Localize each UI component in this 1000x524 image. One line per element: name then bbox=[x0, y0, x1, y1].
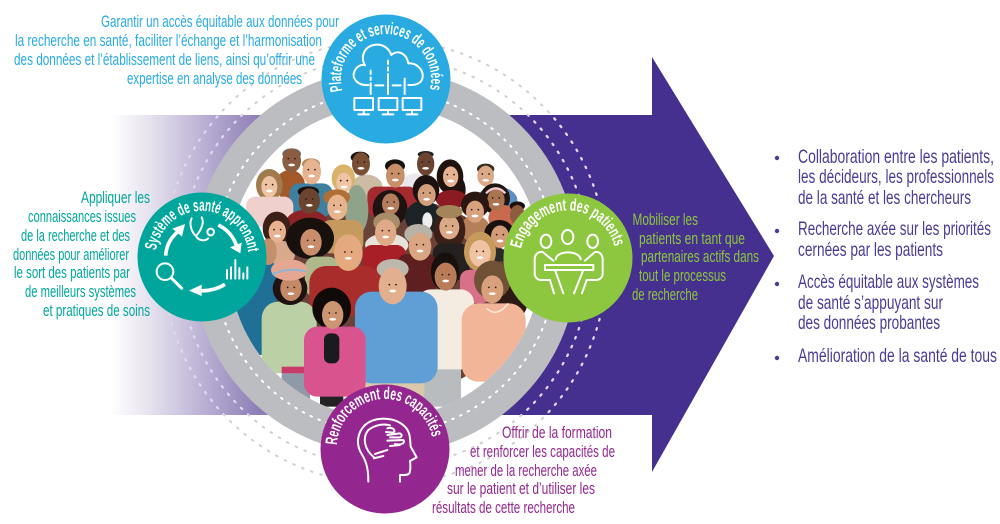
text: système description: de meilleurs systèmes bbox=[25, 282, 136, 301]
text: plateforme description bbox=[14, 12, 339, 88]
text: renforcement description: et renforcer les capacités de bbox=[470, 442, 615, 461]
panel: renforcement des capacités bbox=[320, 384, 450, 514]
heading: engagement: Engagement des patients bbox=[510, 198, 623, 248]
icon: head with brain bbox=[358, 419, 417, 482]
text: renforcement description bbox=[432, 423, 615, 517]
icon: cloud and computers bbox=[354, 45, 423, 114]
text: engagement description: partenaires actifs dans bbox=[641, 247, 759, 266]
text: plateforme description: Garantir un accès équitable aux données pour bbox=[101, 12, 339, 31]
list: outcomes: des données probantes bbox=[798, 312, 940, 334]
photo: crowd of people bbox=[237, 115, 533, 410]
text: système description: Appliquer les bbox=[81, 188, 150, 207]
text: plateforme description: des données et l’établissement de liens, ainsi qu’offrir une bbox=[14, 50, 315, 69]
text: système description: données pour améliorer bbox=[13, 245, 129, 264]
text: engagement description: Mobiliser les bbox=[632, 210, 698, 229]
text: système description: de la recherche et des bbox=[21, 226, 130, 245]
text: système description: connaissances issues bbox=[28, 207, 136, 226]
text: engagement description: de recherche bbox=[632, 285, 698, 304]
icon: learning cycle bbox=[157, 217, 247, 296]
list: outcomes: cernées par les patients bbox=[798, 239, 943, 261]
text: engagement description: patients en tant que bbox=[639, 229, 745, 248]
arrow bbox=[110, 57, 774, 472]
panel: système de santé apprenant bbox=[138, 192, 266, 322]
outer dotted rings bbox=[163, 40, 607, 484]
icon: people around a table bbox=[535, 230, 603, 293]
heading: renforcement: Renforcement des capacités bbox=[325, 386, 442, 444]
text: renforcement description: Offrir de la formation bbox=[502, 423, 612, 442]
panel: engagement des patients bbox=[504, 194, 632, 322]
list: outcomes: de santé s’appuyant sur bbox=[798, 292, 943, 314]
text: système description bbox=[13, 188, 150, 320]
list: outcomes bbox=[775, 146, 997, 367]
text: renforcement description: sur le patient et d’utiliser les bbox=[447, 479, 595, 498]
text: système description: le sort des patients par bbox=[14, 263, 130, 282]
text: renforcement description: résultats de cette recherche bbox=[432, 498, 575, 517]
panel: plateforme et services de données bbox=[322, 14, 450, 144]
grey ring bbox=[211, 88, 559, 436]
text: engagement description bbox=[632, 210, 759, 304]
heading: système: Système de santé apprenant bbox=[144, 201, 259, 252]
text: système description: et pratiques de soins bbox=[43, 301, 150, 320]
inner dotted ring bbox=[214, 91, 556, 433]
heading: plateforme: Plateforme et services de données bbox=[328, 22, 444, 92]
text: engagement description: tout le processus bbox=[639, 266, 726, 285]
text: renforcement description: mener de la recherche axée bbox=[455, 461, 597, 480]
text: plateforme description: expertise en analyse des données bbox=[127, 69, 302, 88]
text: plateforme description: la recherche en santé, faciliter l’échange et l’harmonisation bbox=[15, 31, 322, 50]
